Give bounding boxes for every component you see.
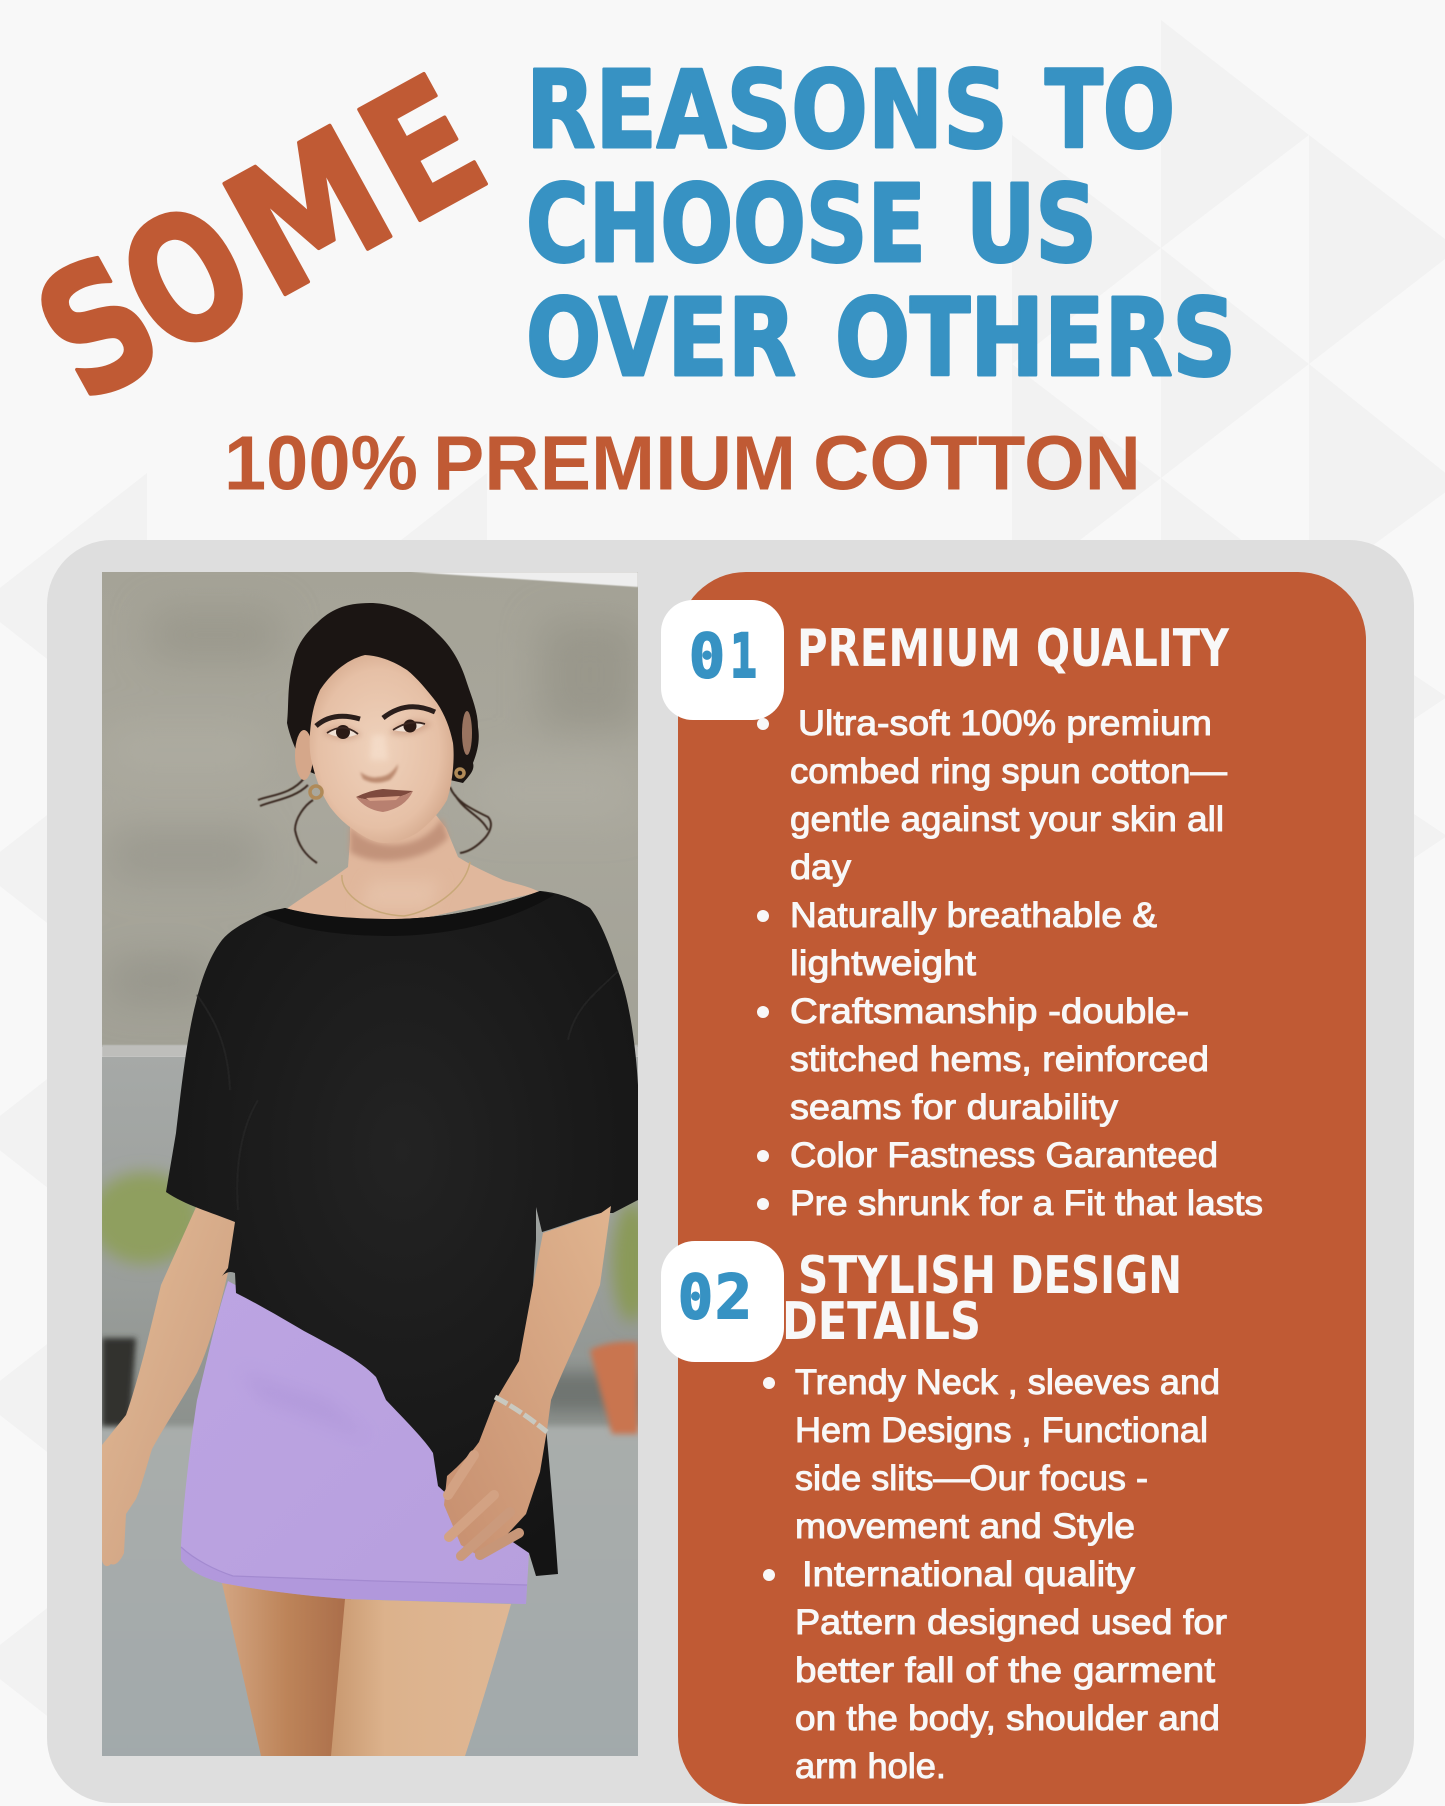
bullet: trendy neck: [763, 1363, 1220, 1546]
bullet list: premium quality: [757, 704, 1263, 1223]
bullet: trendy neck: Hem Designs , Functional: [795, 1411, 1208, 1450]
sleeve seams and folds: [197, 971, 618, 1210]
heading: premium quality: QUALITY: [1036, 619, 1230, 679]
skirt: [181, 1281, 529, 1604]
bullet: trendy neck: movement and Style: [795, 1507, 1135, 1546]
fingers: [448, 1455, 519, 1556]
bullet: international quality: International quality: [802, 1555, 1136, 1594]
bullet: craftsmanship: seams for durability: [790, 1088, 1119, 1127]
badge: 02: 0: [678, 1262, 713, 1333]
face: [295, 655, 472, 843]
title: SOME rotated: [6, 37, 515, 441]
title: SOME rotated: E: [330, 37, 515, 263]
title: reasons to choose us over others: OTHERS: [835, 277, 1236, 401]
bullet: ultra-soft cotton: [757, 704, 1227, 887]
heading: premium quality: PREMIUM: [797, 619, 1021, 679]
bullet: craftsmanship: stitched hems, reinforced: [790, 1040, 1209, 1079]
title: reasons to choose us over others: TO: [1045, 49, 1175, 173]
subtitle: 100% premium cotton: PREMIUM: [433, 420, 796, 506]
bullet: trendy neck: Trendy Neck , sleeves and: [795, 1363, 1220, 1402]
bullet: breathable: lightweight: [790, 944, 976, 983]
bullet: craftsmanship: [757, 992, 1209, 1127]
bullet: international quality: arm hole.: [795, 1747, 946, 1786]
bracelet: [495, 1397, 547, 1432]
photo background: wall, ledge, floor: [90, 572, 650, 1766]
title: reasons to choose us over others: US: [966, 163, 1097, 287]
title: reasons to choose us over others: REASONS: [526, 49, 1008, 173]
neck and chest: [285, 815, 540, 925]
heading: stylish design details: STYLISH: [798, 1246, 996, 1306]
heading: stylish design details: DETAILS: [782, 1292, 981, 1352]
title: SOME rotated: M: [195, 88, 422, 337]
photo: model in black asymmetric top and lilac skirt: [90, 572, 652, 1766]
title: reasons to choose us over others: [526, 49, 1236, 401]
bullet: international quality: Pattern designed used for: [795, 1603, 1227, 1642]
badge: 02: [661, 1241, 784, 1362]
badge: 02: 2: [715, 1262, 752, 1333]
bullet: ultra-soft cotton: combed ring spun cotton—: [790, 752, 1227, 791]
bullet: international quality: better fall of the garment: [795, 1651, 1215, 1690]
heading: stylish design details: [782, 1246, 1182, 1352]
earrings: [310, 769, 464, 798]
left arm: [102, 1205, 235, 1566]
heading: premium quality: [797, 619, 1230, 679]
subtitle: 100% premium cotton: 100%: [224, 420, 418, 506]
legs: [222, 1583, 511, 1756]
title: reasons to choose us over others: OVER: [526, 277, 796, 401]
bullet: breathable: Naturally breathable &: [790, 896, 1157, 935]
bullet: ultra-soft cotton: day: [790, 848, 852, 887]
photo plants and pots: [90, 1172, 652, 1434]
title: reasons to choose us over others: CHOOSE: [526, 163, 926, 287]
title: SOME rotated: S: [6, 216, 191, 441]
neckband: [262, 891, 554, 936]
right arm and hand: [444, 1206, 611, 1556]
badge: 01: 0: [689, 621, 725, 692]
bullet: international quality: on the body, shoulder and: [795, 1699, 1220, 1738]
necklace: [342, 862, 470, 916]
bullet: trendy neck: side slits—Our focus -: [795, 1459, 1148, 1498]
bullet list: stylish design: [763, 1363, 1227, 1786]
bullet: pre shrunk: Pre shrunk for a Fit that lasts: [790, 1184, 1263, 1223]
bullet: color fastness: Color Fastness Garanteed: [790, 1136, 1218, 1175]
bullet: craftsmanship: Craftsmanship -double-: [790, 992, 1189, 1031]
badge: 01: [661, 600, 784, 720]
panel: orange details card: [678, 572, 1366, 1804]
black top: [166, 891, 638, 1576]
subtitle: 100% premium cotton: [224, 420, 1141, 506]
hair: [287, 603, 479, 783]
panel: grey background card: [47, 540, 1414, 1803]
loose hair strands: [258, 777, 491, 863]
badge: 01: 1: [730, 621, 757, 692]
title: SOME rotated: O: [89, 164, 285, 395]
bullet: ultra-soft cotton: gentle against your skin all: [790, 800, 1224, 839]
bullet: breathable: [757, 896, 1157, 983]
heading: stylish design details: DESIGN: [1010, 1246, 1182, 1306]
bullet: ultra-soft cotton: Ultra-soft 100% premium: [798, 704, 1212, 743]
subtitle: 100% premium cotton: COTTON: [813, 420, 1141, 506]
bullet: international quality: [763, 1555, 1227, 1786]
skirt hem: [181, 1370, 527, 1604]
